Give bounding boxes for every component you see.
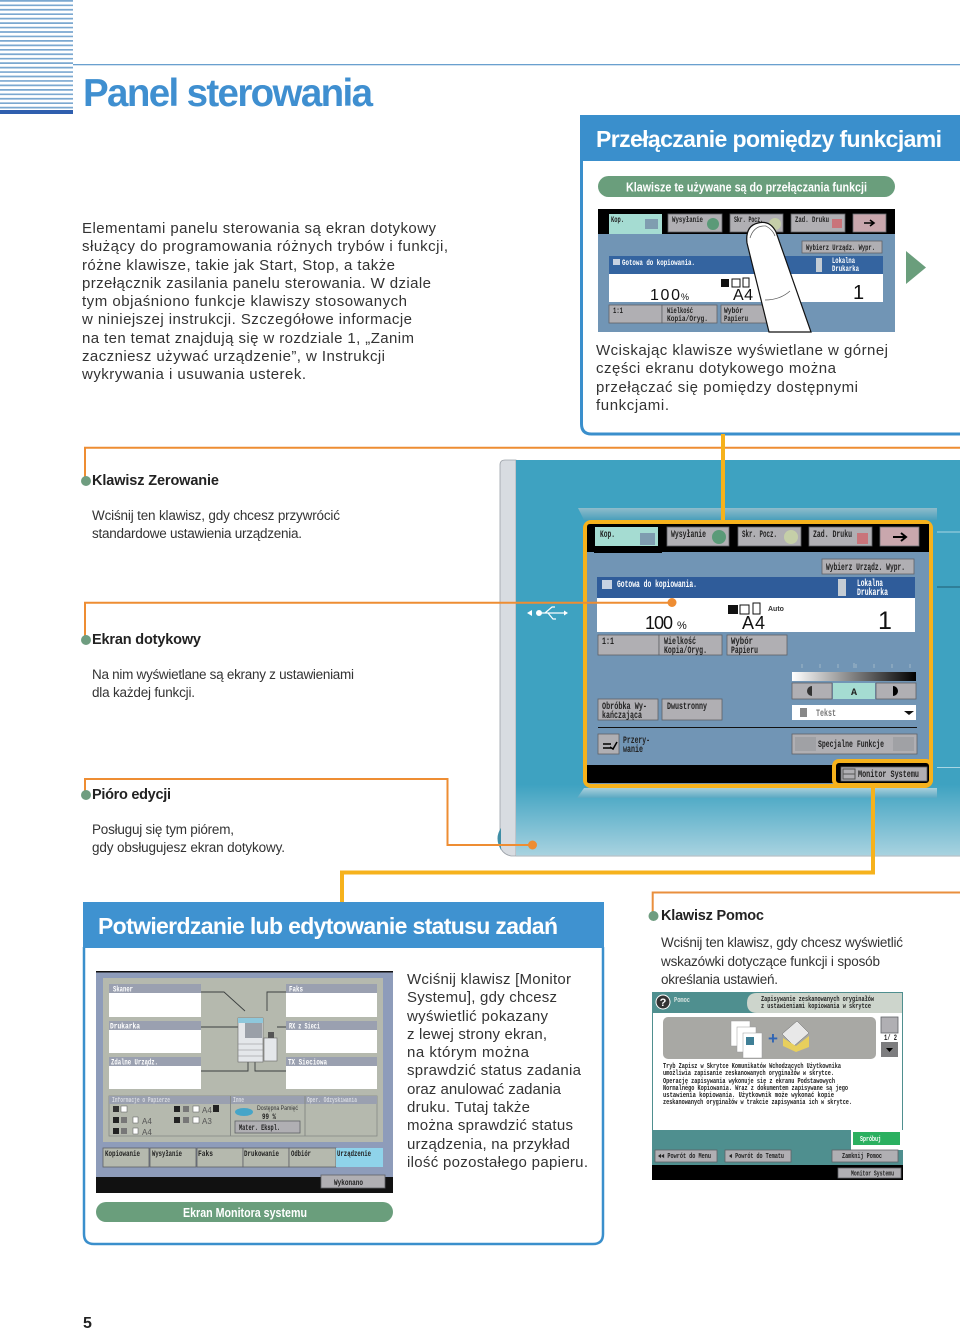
bottom tab bar: Odbiór	[291, 1149, 311, 1159]
panel heading: Potwierdzanie lub edytowanie statusu zadań	[98, 913, 558, 939]
bottom tab bar: Drukowanie	[244, 1149, 279, 1159]
connector: switch panel to screen	[721, 434, 725, 520]
paper information area: Inne	[233, 1097, 244, 1105]
copy settings display: 1	[878, 607, 892, 635]
arrow	[906, 251, 926, 284]
small touch screen illustration	[598, 209, 895, 332]
callout: reset key: Wciśnij ten klawisz, gdy chcesz przywrócić	[92, 508, 340, 523]
paper information area: Mater. Ekspl.	[239, 1123, 280, 1133]
job status description: Wciśnij klawisz [Monitor	[407, 971, 571, 988]
copy settings display: Auto	[768, 606, 784, 613]
touch screen: Wielkość	[664, 636, 696, 648]
callout: touch screen: Ekran dotykowy	[92, 632, 201, 648]
system monitor screen: Skaner	[113, 984, 133, 994]
job status description: sprawdzić status zadania	[407, 1062, 582, 1079]
text mode dropdown	[792, 705, 916, 720]
device control panel illustration	[498, 460, 960, 856]
density control	[792, 663, 916, 699]
small touch screen illustration: Wybierz Urządz. Wypr.	[806, 243, 875, 253]
touch screen: 1:1	[602, 637, 614, 648]
device body	[516, 460, 960, 856]
caption pill: system monitor	[96, 1202, 393, 1222]
icon: documents plus mailbox	[731, 1021, 809, 1058]
callout: touch screen	[81, 632, 354, 700]
system monitor screen: RX z Sieci	[289, 1022, 320, 1032]
leader line: help key	[653, 892, 960, 916]
system monitor screen: Faks	[289, 984, 303, 994]
small touch screen illustration: 1	[853, 282, 864, 304]
help screen: Monitor Systemu	[851, 1170, 894, 1178]
help body text	[663, 1063, 852, 1107]
panel: job status	[83, 902, 604, 1244]
panel outline	[84, 947, 603, 1244]
job status description: można sprawdzić status	[407, 1117, 573, 1134]
green caption pill	[598, 176, 895, 197]
leader dot: touch screen	[668, 598, 676, 607]
monitor system key	[834, 761, 931, 785]
callout: stylus: Posługuj się tym piórem,	[92, 822, 234, 837]
paper information area: A4	[142, 1128, 152, 1137]
help body text: Normalnego Kopiowania. Wraz z dokumentem zapisywane są jego	[663, 1085, 848, 1093]
small touch screen illustration: 100	[650, 287, 680, 304]
help screen: ◄◄ Powrót do Menu	[658, 1153, 711, 1161]
callout: reset key	[81, 473, 340, 541]
intro text block: służący do programowania różnych trybów i funkcji,	[82, 238, 448, 255]
callout: help key: Klawisz Pomoc	[661, 908, 764, 924]
touch screen: Wybór	[731, 636, 753, 648]
panel outline	[582, 160, 960, 434]
status bar: Gotowa do kopiowania.	[617, 579, 697, 591]
touch screen: Obróbka Wy-	[602, 701, 647, 713]
touch screen: Specjalne Funkcje	[818, 739, 884, 751]
small touch screen illustration: Papieru	[724, 314, 748, 324]
small touch screen illustration: A4	[733, 287, 753, 304]
help body text: umożliwia zapisanie zeskanowanych oryginałów w skrytce.	[663, 1070, 834, 1078]
intro text block: różne klawisze, takie jak Start, Stop, a także	[82, 257, 395, 274]
intro text block: w niniejszej instrukcji. Szczegółowe informacje	[81, 311, 412, 328]
touch screen: Przery-	[623, 736, 650, 747]
leader line: reset key	[85, 448, 960, 481]
icon: documents plus mailbox: +	[768, 1029, 778, 1048]
function tabs: Skr. Pocz.	[742, 529, 777, 541]
job status description: z lewej strony ekran,	[407, 1026, 547, 1043]
callout: help key: określania ustawień.	[661, 972, 778, 987]
green caption pill: Klawisze te używane są do przełączania funkcji	[626, 180, 867, 194]
text mode dropdown: Tekst	[816, 708, 836, 720]
icon: copier machine	[238, 1018, 277, 1062]
small touch screen illustration: Skr. Pocz.	[734, 215, 763, 225]
status bar	[597, 577, 915, 599]
help screen: Zapisywanie zeskanowanych oryginałów	[761, 996, 875, 1004]
callout: touch screen: Na nim wyświetlane są ekrany z ustawieniami	[92, 667, 354, 682]
switching description: części ekranu dotykowego można	[596, 360, 837, 377]
job status description: wyświetlić pokazany	[406, 1008, 548, 1025]
help screen: z ustawieniami kopiowania w skrytce	[761, 1003, 871, 1011]
touch screen	[585, 522, 931, 786]
intro text block: zaczniesz używać urządzenie”, w Instrukcji	[82, 348, 385, 365]
small touch screen illustration: Kopia/Oryg.	[667, 314, 708, 324]
copy settings display: A4	[742, 613, 765, 633]
monitor system key: Monitor Systemu	[858, 769, 919, 781]
paper information area	[109, 1096, 377, 1137]
paper information area: A4	[202, 1106, 212, 1115]
paper information area: Oper. Odzyskiwania	[307, 1097, 358, 1105]
function tabs: Zad. Druku	[813, 529, 852, 541]
bottom tab bar: Faks	[198, 1149, 213, 1159]
icon: USB symbol	[527, 607, 568, 619]
paper information area: 99 %	[262, 1112, 277, 1122]
job status description: ilość pozostałego papieru.	[407, 1154, 588, 1171]
job status description: oraz anulować zadania	[407, 1081, 562, 1098]
help body text: ustawienia kopiowania. Użytkownik może wykonać kopie	[663, 1092, 834, 1100]
copy settings display: %	[677, 620, 687, 632]
intro text block: przełącznik zasilania panelu sterowania. W dziale	[82, 275, 431, 292]
job status description: urządzenia, na przykład	[407, 1136, 570, 1153]
help screen: Zamknij Pomoc	[842, 1153, 882, 1161]
touch screen: kańczająca	[602, 710, 642, 722]
leader line: stylus	[85, 779, 533, 845]
bottom tab bar: Urządzenie	[337, 1149, 371, 1159]
panel heading: Przełączanie pomiędzy funkcjami	[596, 126, 942, 152]
small touch screen illustration: Zad. Druku	[795, 215, 829, 225]
function tabs: Kop.	[600, 530, 615, 541]
status bar: Lokalna	[857, 578, 883, 590]
small touch screen illustration: 1:1	[613, 306, 623, 316]
help body text: Tryb Zapisz w Skrytce Komunikatów Wchodzących Użytkownika	[663, 1063, 842, 1071]
job status description	[406, 971, 588, 1171]
callout: stylus: gdy obsługujesz ekran dotykowy.	[92, 840, 285, 855]
callout: stylus: Pióro edycji	[92, 787, 171, 803]
switching description: funkcjami.	[596, 397, 669, 414]
system monitor screen: Zdalne Urządz.	[111, 1058, 158, 1068]
panel: switching functions	[580, 115, 960, 434]
touch screen: Kopia/Oryg.	[664, 645, 707, 657]
switching description: przełączać się pomiędzy dostępnymi	[596, 379, 858, 396]
touch screen: Papieru	[731, 645, 758, 657]
help screen: ?	[660, 997, 667, 1009]
help screen: Pomoc	[674, 997, 690, 1005]
small touch screen illustration: Kop.	[611, 215, 624, 225]
touch screen: wanie	[623, 744, 643, 756]
callout: reset key: standardowe ustawienia urządzenia.	[92, 526, 302, 541]
copy settings display	[597, 598, 915, 635]
decorative header stripes	[0, 0, 960, 114]
system monitor screen	[96, 971, 393, 1193]
help body text: Operację zapisywania wykonuje się z ekranu Podstawowych	[663, 1078, 835, 1086]
system monitor screen: TX Sieciowa	[288, 1058, 327, 1068]
paper information area: Dostępna Pamięć	[257, 1106, 298, 1112]
system monitor screen: Drukarka	[110, 1022, 140, 1032]
small touch screen illustration: Drukarka	[832, 264, 859, 274]
callout: reset key: Klawisz Zerowanie	[92, 473, 219, 489]
density control: A	[851, 688, 857, 699]
intro text block: na ten temat znajdują się w rozdziale 1, „Zanim	[82, 330, 414, 347]
bottom tab bar	[103, 1148, 385, 1188]
function tabs	[595, 527, 919, 546]
switching description	[596, 342, 888, 414]
intro text block	[81, 220, 448, 383]
job status description: druku. Tutaj także	[407, 1099, 530, 1116]
small touch screen illustration: Lokalna	[832, 256, 855, 266]
leader dot: stylus	[528, 840, 537, 850]
callout: touch screen: dla każdej funkcji.	[92, 685, 195, 700]
touch screen: Dwustronny	[667, 702, 707, 713]
leader line: touch screen	[85, 603, 672, 640]
intro text block: Elementami panelu sterowania są ekran dotykowy	[82, 220, 436, 237]
paper information area: A4	[142, 1117, 152, 1126]
bottom tab bar: Wykonano	[334, 1178, 363, 1188]
title: Panel sterowania	[83, 72, 374, 115]
small touch screen illustration: Wybór	[724, 306, 743, 316]
panel heading	[580, 115, 960, 161]
callout: help key: wskazówki dotyczące funkcji i sposób	[660, 954, 880, 969]
paper information area: Informacje o Papierze	[112, 1097, 170, 1105]
help screen: ◄ Powrót do Tematu	[729, 1153, 784, 1161]
small touch screen illustration: Wielkość	[667, 306, 693, 316]
copy settings display: 100	[645, 613, 673, 633]
switching description: Wciskając klawisze wyświetlane w górnej	[596, 342, 888, 359]
function tabs: Wysyłanie	[671, 529, 706, 541]
job status description: na którym można	[407, 1044, 530, 1061]
caption pill: system monitor: Ekran Monitora systemu	[183, 1205, 307, 1220]
callout: help key: Wciśnij ten klawisz, gdy chcesz wyświetlić	[661, 935, 903, 950]
icon: pointing finger	[747, 222, 811, 332]
callout: stylus	[81, 787, 285, 855]
bottom tab bar: Kopiowanie	[105, 1149, 140, 1159]
callout: help key	[648, 908, 903, 987]
intro text block: tym objaśniono funkcje klawiszy stosowanych	[82, 293, 407, 310]
intro text block: wykrywania i usuwania usterek.	[81, 366, 306, 383]
help screen: 1/ 2	[884, 1033, 897, 1043]
paper information area: A3	[202, 1117, 212, 1126]
connector: monitor key to status panel	[342, 787, 873, 902]
help screen: Spróbuj	[860, 1136, 881, 1144]
touch screen: Wybierz Urządz. Wypr.	[826, 562, 905, 574]
help body text: zeskanowanych oryginałów w trakcie zapisywania ich w skrytce.	[663, 1099, 852, 1107]
bottom tab bar: Wysyłanie	[152, 1149, 182, 1159]
status bar: Drukarka	[857, 587, 888, 599]
device side strip	[500, 460, 516, 856]
small touch screen illustration: %	[681, 292, 689, 302]
small touch screen illustration: Gotowa do kopiowania.	[622, 258, 695, 268]
help screen	[652, 992, 903, 1180]
panel heading	[83, 902, 604, 948]
small touch screen illustration: Wysyłanie	[672, 215, 703, 225]
job status description: Systemu], gdy chcesz	[407, 989, 557, 1006]
